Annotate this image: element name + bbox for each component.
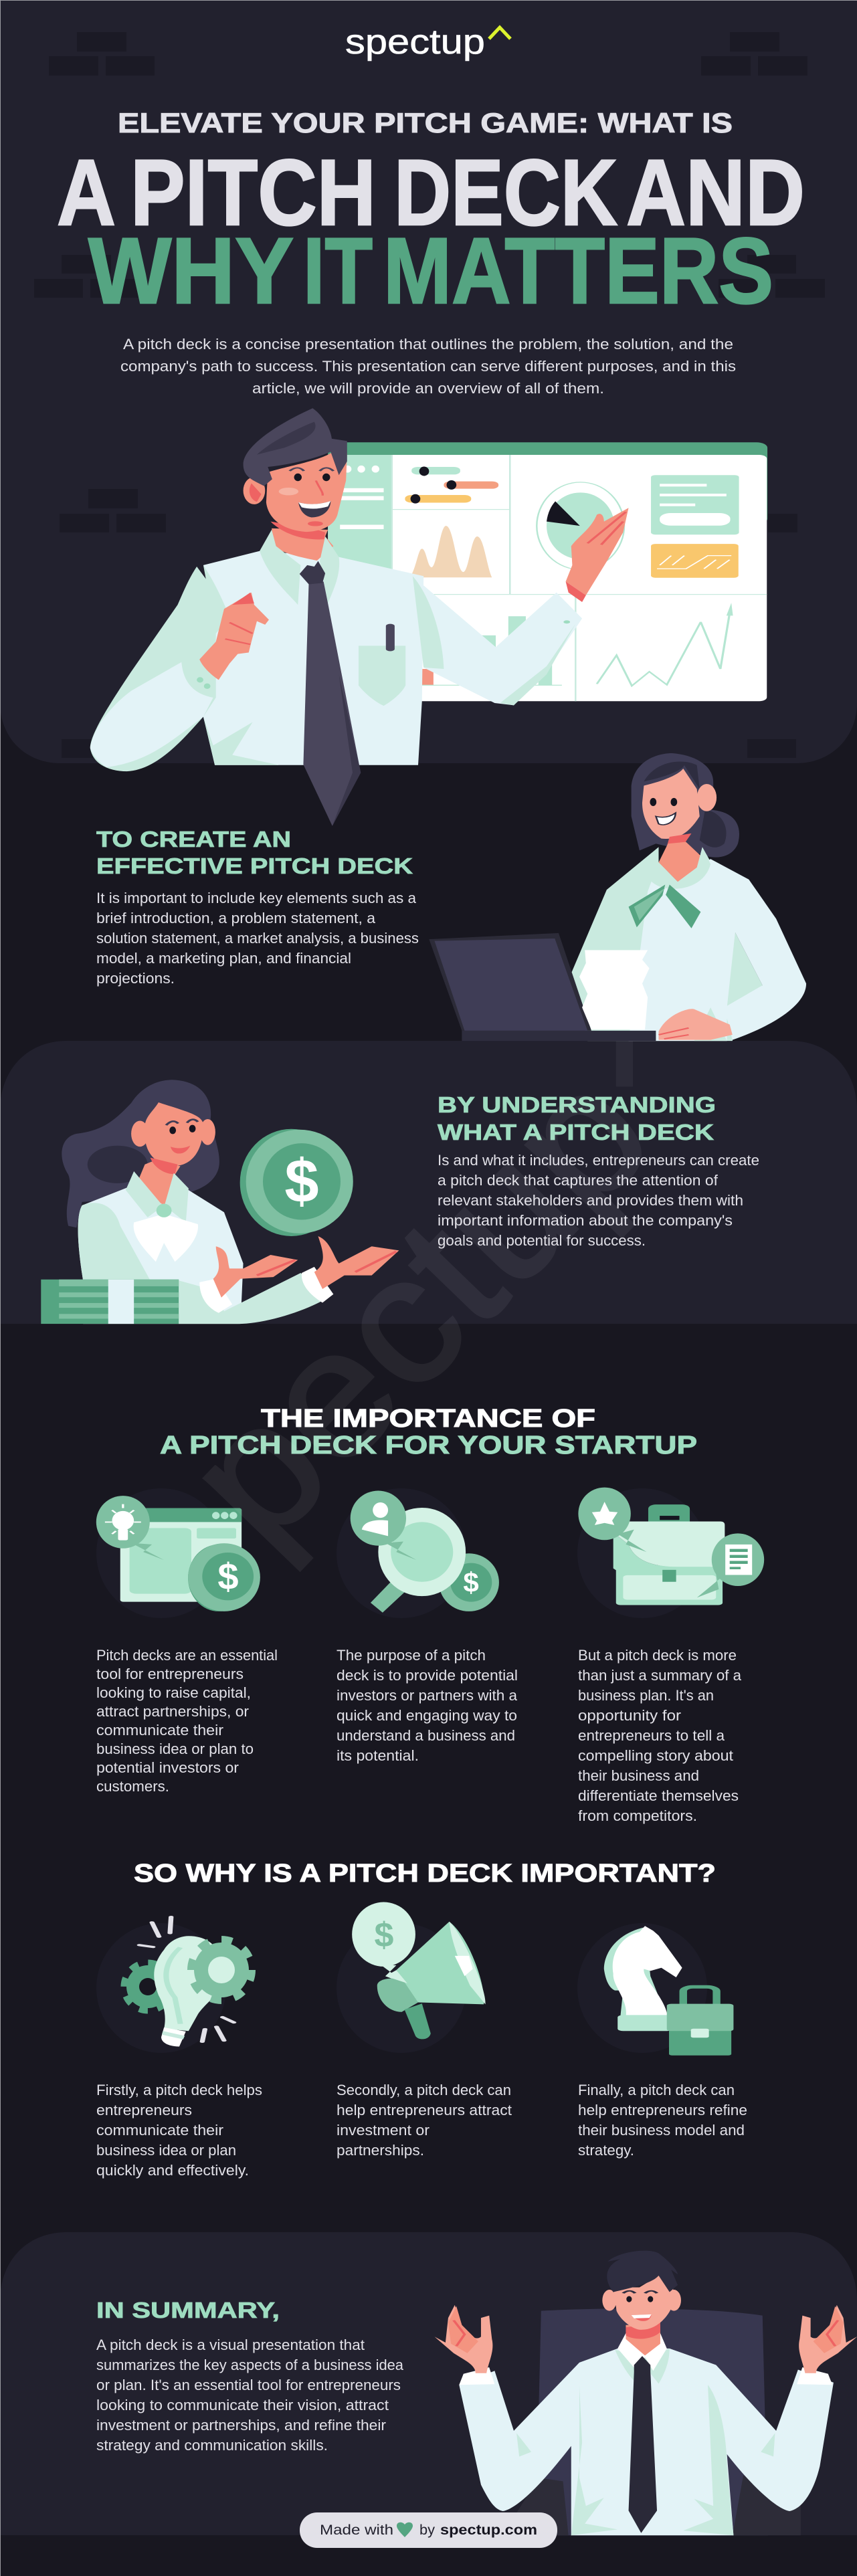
text block: firstly: communicate their	[96, 2122, 223, 2139]
watermark: spectup: pectup	[147, 1031, 688, 1581]
text block: column 3 story: their business and	[578, 1767, 699, 1784]
text block: key elements: brief introduction, a problem statement, a	[96, 910, 376, 926]
text block: column 3 story: compelling story about	[578, 1747, 733, 1764]
text block: column 1 essential tool: customers.	[96, 1778, 169, 1795]
panel: summary background	[0, 2232, 857, 2535]
panel: understanding background	[0, 1041, 857, 1324]
icon: megaphone: $	[375, 1916, 394, 1955]
text block: column 3 story: business plan. It's an	[578, 1687, 714, 1704]
illustration: woman with coin and money: $	[284, 1147, 319, 1215]
text block: understanding: Is and what it includes, entrepreneurs can create	[438, 1152, 759, 1169]
text block: finally: their business model and	[578, 2122, 745, 2139]
text block: key elements	[96, 890, 419, 987]
text block: column 3 story: differentiate themselves	[578, 1787, 739, 1804]
text block: summary: investment or partnerships, and refine their	[96, 2417, 386, 2434]
text block: key elements: projections.	[96, 970, 175, 987]
text block: understanding: relevant stakeholders and provides them with	[438, 1192, 743, 1209]
heading: the importance of a pitch deck	[160, 1405, 697, 1460]
text block: column 3 story: entrepreneurs to tell a	[578, 1727, 725, 1744]
text block: understanding: goals and potential for success.	[438, 1232, 646, 1249]
text block: column 2 purpose: its potential.	[337, 1747, 419, 1764]
heading: so why is a pitch deck important: SO WHY IS A PITCH DECK IMPORTANT?	[134, 1860, 716, 1888]
text block: column 2 purpose: investors or partners with a	[337, 1687, 518, 1704]
text block: key elements: model, a marketing plan, and financial	[96, 950, 351, 967]
logo: spectup: spectup	[345, 23, 485, 62]
heading: by understanding: BY UNDERSTANDING	[438, 1092, 716, 1117]
text block: key elements: solution statement, a market analysis, a business	[96, 930, 419, 947]
coin	[240, 1129, 353, 1236]
heading: by understanding: WHAT A PITCH DECK	[438, 1120, 714, 1145]
title: AND	[626, 140, 805, 245]
heading: to create an effective pitch deck	[96, 827, 413, 878]
text block: column 3 story: from competitors.	[578, 1807, 697, 1824]
icon: magnifier and person: $	[463, 1567, 479, 1598]
footer pill: made with love by spectup.com: spectup.com	[440, 2522, 537, 2538]
text block: summary: summarizes the key aspects of a business idea	[96, 2357, 404, 2373]
text block: column 1 essential tool: looking to raise capital,	[96, 1684, 251, 1701]
presenter man	[90, 408, 629, 826]
money stack	[41, 1280, 179, 1324]
text block: column 3 story: But a pitch deck is more	[578, 1647, 737, 1664]
text block: secondly: partnerships.	[337, 2142, 424, 2159]
text block: firstly: quickly and effectively.	[96, 2162, 249, 2179]
illustration: man in chair raising hands	[435, 2251, 857, 2535]
text block: secondly: help entrepreneurs attract	[337, 2102, 512, 2118]
text block: column 2 purpose: understand a business and	[337, 1727, 515, 1744]
text block: summary: looking to communicate their vision, attract	[96, 2397, 389, 2413]
text block: summary: or plan. It's an essential tool for entrepreneurs	[96, 2377, 401, 2393]
intro text	[120, 336, 736, 397]
text block: key elements: It is important to include key elements such as a	[96, 890, 417, 906]
icon: magnifier and person	[351, 1491, 499, 1613]
illustration: woman with coin and money	[41, 1080, 399, 1324]
text block: understanding	[438, 1152, 759, 1249]
raised hand right	[797, 2305, 857, 2385]
footer pill: made with love by spectup.com	[300, 2512, 557, 2548]
heading: to create an effective pitch deck: EFFECTIVE PITCH DECK	[96, 854, 413, 878]
title: WHY	[88, 218, 294, 323]
text block: firstly: Firstly, a pitch deck helps	[96, 2082, 262, 2098]
title: MATTERS	[383, 218, 773, 323]
title: DECK	[394, 140, 617, 245]
text block: column 3 story	[578, 1647, 742, 1824]
text block: finally: strategy.	[578, 2142, 634, 2159]
title: A	[57, 140, 116, 245]
text block: column 1 essential tool	[96, 1647, 278, 1795]
text block: column 2 purpose	[337, 1647, 518, 1764]
text block: finally: help entrepreneurs refine	[578, 2102, 747, 2118]
text block: firstly	[96, 2082, 262, 2179]
text block: firstly: business idea or plan	[96, 2142, 236, 2159]
illustration: presenter with dashboard screen	[90, 408, 767, 826]
text block: secondly: Secondly, a pitch deck can	[337, 2082, 511, 2098]
icon: idea window and coin	[96, 1496, 260, 1611]
text block: summary	[96, 2337, 404, 2454]
text block: column 1 essential tool: Pitch decks are an essential	[96, 1647, 278, 1664]
text block: firstly: entrepreneurs	[96, 2102, 192, 2118]
heading: by understanding	[438, 1092, 716, 1145]
icon: briefcase	[578, 1488, 764, 1605]
text block: secondly	[337, 2082, 512, 2159]
text block: summary: strategy and communication skills.	[96, 2437, 328, 2454]
heading: the importance of a pitch deck: A PITCH DECK FOR YOUR STARTUP	[160, 1431, 697, 1460]
text block: column 3 story: than just a summary of a	[578, 1667, 742, 1684]
text block: column 1 essential tool: communicate their	[96, 1722, 223, 1739]
icon: heart	[397, 2522, 413, 2537]
illustration: woman at laptop	[429, 753, 806, 1086]
text block: understanding: important information about the company's	[438, 1212, 733, 1229]
text block: column 3 story: opportunity for	[578, 1707, 681, 1724]
text block: column 2 purpose: The purpose of a pitch	[337, 1647, 486, 1664]
icon: megaphone	[352, 1902, 486, 2039]
intro text: A pitch deck is a concise presentation that outlines the problem, the solution, and the	[123, 336, 733, 353]
icon: light bulb and gears	[124, 1917, 252, 2047]
panel: hero background	[0, 0, 857, 763]
title	[57, 107, 805, 323]
text block: column 1 essential tool: potential investors or	[96, 1759, 239, 1776]
text block: column 1 essential tool: business idea or plan to	[96, 1741, 254, 1757]
text block: column 1 essential tool: attract partnerships, or	[96, 1703, 249, 1720]
title: ELEVATE YOUR PITCH GAME: WHAT IS	[118, 107, 733, 138]
text block: understanding: a pitch deck that captures the attention of	[438, 1172, 719, 1189]
text block: summary: A pitch deck is a visual presentation that	[96, 2337, 365, 2353]
heading: in summary: IN SUMMARY,	[96, 2298, 280, 2322]
title: IT	[303, 218, 373, 323]
text block: column 2 purpose: quick and engaging way to	[337, 1707, 517, 1724]
heading: the importance of a pitch deck: THE IMPORTANCE OF	[261, 1405, 595, 1433]
intro text: company's path to success. This presentation can serve different purposes, and in this	[120, 358, 736, 375]
text block: column 2 purpose: deck is to provide potential	[337, 1667, 518, 1684]
title: PITCH	[130, 140, 376, 245]
raised hand left	[435, 2305, 494, 2385]
icon: chess knight and bag	[604, 1926, 733, 2056]
text block: column 1 essential tool: tool for entrepreneurs	[96, 1666, 244, 1682]
text block: secondly: investment or	[337, 2122, 430, 2139]
footer pill: made with love by spectup.com: Made with	[320, 2522, 393, 2538]
footer pill: made with love by spectup.com: by	[419, 2522, 436, 2538]
intro text: article, we will provide an overview of all of them.	[252, 380, 604, 397]
text block: finally: Finally, a pitch deck can	[578, 2082, 735, 2098]
panel content: by understanding what a pitch deck	[438, 1092, 759, 1249]
dashboard screen	[328, 442, 767, 701]
heading: to create an effective pitch deck: TO CREATE AN	[96, 827, 291, 852]
text block: finally	[578, 2082, 747, 2159]
icon: idea window and coin: $	[217, 1555, 239, 1597]
